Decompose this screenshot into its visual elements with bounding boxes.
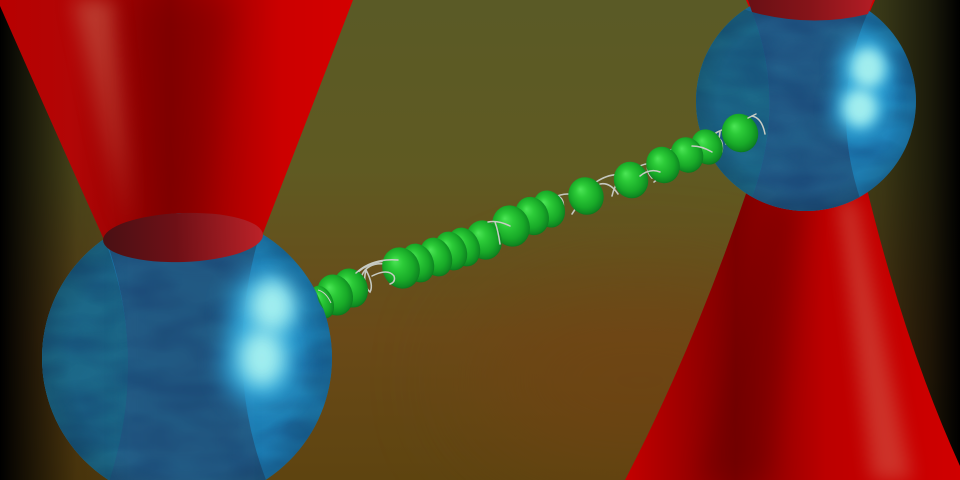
left focus lens: beam overlap xyxy=(102,210,264,265)
bright highlight xyxy=(832,36,894,138)
outer left lens xyxy=(42,240,128,480)
right trapping bead: blue sphere xyxy=(690,0,916,215)
bright highlight xyxy=(222,268,302,406)
fibre: DNA helix and green nucleosome beads xyxy=(311,108,765,321)
nucleosome beads xyxy=(311,108,764,321)
laser beam: upper right red cone xyxy=(746,0,875,16)
DNA helix strands behind beads xyxy=(358,129,739,292)
central beam waist xyxy=(108,240,268,480)
outer left lens xyxy=(696,10,770,197)
small bead partly hidden by the left sphere xyxy=(314,286,334,318)
laser beam: upper left red cone xyxy=(0,0,353,242)
right focus lens: beam overlap xyxy=(748,0,873,21)
central beam waist xyxy=(745,12,868,215)
left trapping bead: blue sphere xyxy=(30,200,332,480)
laser beam: lower right red cone xyxy=(625,185,960,480)
DNA helix strands in front of beads xyxy=(356,114,765,284)
